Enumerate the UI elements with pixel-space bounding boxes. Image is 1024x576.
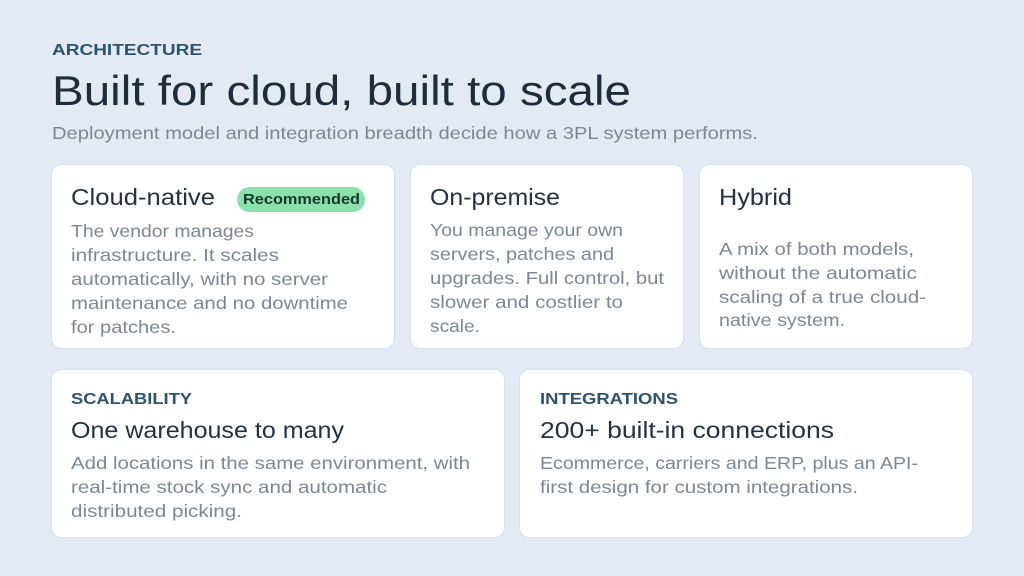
text: on-premise description: servers, patches and — [430, 244, 614, 264]
text: integrations description: first design for custom integrations. — [540, 477, 858, 497]
text: scalability description: distributed picking. — [71, 501, 242, 521]
text: hybrid description: without the automatic — [718, 263, 917, 283]
text: cloud-native description — [71, 221, 348, 337]
subtitle: Deployment model and integration breadth decide how a 3PL system performs. — [52, 123, 758, 143]
panel: hybrid — [700, 164, 972, 348]
text: on-premise description — [430, 220, 664, 336]
text: hybrid description: native system. — [719, 310, 845, 330]
panel: integrations — [520, 370, 972, 538]
heading: cloud-native: Cloud-native — [71, 184, 215, 210]
text: cloud-native description: for patches. — [71, 317, 176, 337]
text: on-premise description: You manage your own — [430, 220, 623, 240]
label: scalability: SCALABILITY — [71, 391, 192, 408]
text: hybrid description: A mix of both models, — [719, 239, 914, 259]
badge: recommended — [237, 187, 365, 212]
title: Built for cloud, built to scale — [52, 67, 631, 114]
text: hybrid description — [718, 239, 926, 330]
text: cloud-native description: infrastructure. It scales — [71, 245, 279, 265]
text: cloud-native description: automatically, with no server — [71, 269, 328, 289]
text: on-premise description: slower and costlier to — [430, 292, 623, 312]
text: scalability description — [71, 453, 470, 521]
text: hybrid description: scaling of a true cloud- — [719, 287, 926, 307]
heading: hybrid: Hybrid — [719, 184, 792, 210]
eyebrow: architecture: ARCHITECTURE — [52, 42, 202, 59]
panel: scalability — [52, 370, 504, 538]
text: integrations description — [540, 453, 918, 497]
heading: 200+ built-in connections: 200+ built-in connections — [540, 417, 834, 443]
heading: on-premise: On-premise — [430, 184, 560, 210]
heading: one warehouse to many: One warehouse to many — [71, 417, 344, 443]
label: integrations: INTEGRATIONS — [540, 391, 678, 408]
badge: recommended: Recommended — [243, 191, 360, 208]
panel: on-premise — [410, 164, 684, 348]
text: integrations description: Ecommerce, carriers and ERP, plus an API- — [540, 453, 918, 473]
text: scalability description: real-time stock sync and automatic — [71, 477, 387, 497]
text: scalability description: Add locations in the same environment, with — [71, 453, 470, 473]
text: on-premise description: upgrades. Full control, but — [430, 268, 664, 288]
text: cloud-native description: The vendor manages — [71, 221, 254, 241]
text: cloud-native description: maintenance and no downtime — [71, 293, 348, 313]
text: on-premise description: scale. — [430, 316, 480, 336]
panel: cloud-native — [52, 164, 394, 348]
